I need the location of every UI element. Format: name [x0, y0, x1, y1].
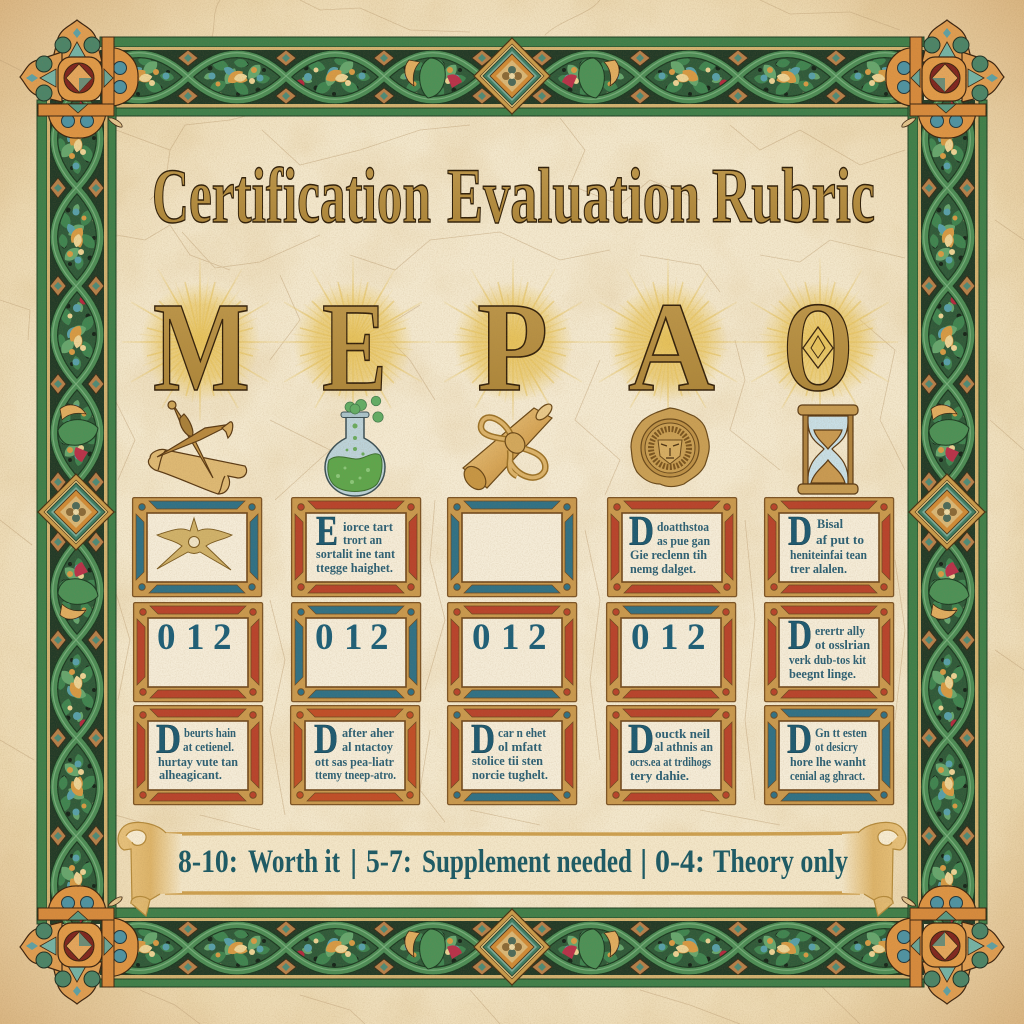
- card: P description: [448, 706, 577, 805]
- letter M with sunburst: [122, 258, 278, 420]
- rubric cards: column 3 P: [448, 498, 577, 805]
- card: A description: doatthstoa: [657, 519, 709, 534]
- letter E with sunburst: [275, 258, 431, 420]
- card: O description 2: beegnt linge.: [789, 666, 856, 681]
- letter A with sunburst: A: [628, 276, 715, 418]
- card: O description 2: [765, 603, 894, 702]
- card: O description 3: cenial ag ghract.: [790, 768, 865, 783]
- letter O with sunburst and diamond: [742, 258, 898, 420]
- card: A description 2: D: [628, 717, 654, 763]
- card: O description: Bisal: [817, 516, 843, 531]
- card: O description 2: erertr ally: [815, 623, 865, 638]
- card: M description: D: [156, 717, 181, 763]
- card: O description: heniteinfai tean: [790, 547, 868, 562]
- icon: dagger and compass on scroll: [148, 401, 247, 494]
- rubric cards: column 2 E: [291, 498, 421, 805]
- card: E description 2: ttemy tneep-atro.: [315, 767, 396, 782]
- card: E score 0 1 2: 012: [315, 617, 388, 658]
- diamond: left: [38, 474, 114, 550]
- card: M description: hurtay vute tan: [158, 754, 239, 769]
- card: O description 3: D: [787, 717, 812, 763]
- card: P score 0 1 2: [448, 603, 577, 702]
- scroll banner with score key: Theory only: [713, 844, 848, 880]
- card: O description: af put to: [816, 532, 864, 547]
- left border band: [37, 100, 116, 924]
- card: E description 2: [291, 706, 420, 805]
- scroll banner with score key: 0-4:: [655, 844, 705, 880]
- scroll banner with score key: [118, 822, 906, 916]
- letter A with sunburst: [590, 258, 746, 420]
- icon: rolled scroll with ribbon: [460, 401, 555, 494]
- card: E description: ttegge haighet.: [316, 560, 393, 575]
- card: P blank: [448, 498, 577, 597]
- scroll banner with score key: 5-7:: [366, 844, 412, 880]
- card: O description 2: verk dub-tos kit: [789, 652, 867, 667]
- card: M score 0 1 2: [134, 603, 263, 702]
- card: A description 2: ouctk neil: [655, 726, 710, 741]
- card: A description: D: [629, 509, 654, 555]
- card: O description 3: hore lhe wanht: [790, 754, 867, 769]
- letter P with sunburst: P: [477, 276, 548, 418]
- card: O description: [765, 498, 894, 597]
- letter M with sunburst: M: [153, 276, 250, 418]
- diamond: right: [909, 474, 985, 550]
- card: A description 2: ocrs.ea at trdihogs: [630, 754, 711, 769]
- card: A description 2: al athnis an: [654, 739, 714, 754]
- card: P score 0 1 2: 012: [472, 617, 546, 658]
- card: O description 2: ot osslrian: [815, 637, 871, 652]
- right border band: [908, 100, 987, 924]
- card: E description 2: al ntactoy: [342, 739, 393, 754]
- card: O description: D: [788, 509, 812, 555]
- card: A description: nemg dalget.: [630, 561, 696, 576]
- card: P description: car n ehet: [498, 725, 547, 740]
- title: Rubric: [712, 152, 875, 239]
- diamond: top: [474, 38, 550, 114]
- card: A description: [608, 498, 737, 597]
- card: E description: trort an: [343, 532, 383, 547]
- rubric cards: column 4 A: [607, 498, 737, 805]
- card: P description: stolice tii sten: [472, 753, 544, 768]
- title: Evaluation: [447, 152, 700, 239]
- card: A description: Gie reclenn tih: [630, 547, 708, 562]
- card: M compass emblem: [133, 498, 262, 597]
- card: E description 2: ott sas pea-liatr: [315, 754, 394, 769]
- card: O description 3: [765, 706, 894, 805]
- card: P description: ol mfatt: [498, 739, 543, 754]
- card: M score 0 1 2: 012: [157, 617, 232, 658]
- scroll banner with score key: |: [350, 844, 357, 880]
- scroll banner with score key: |: [640, 844, 647, 880]
- card: O description 2: D: [788, 613, 812, 659]
- card: O description 3: ot desicry: [815, 739, 858, 754]
- card: A description 2: tery dahie.: [630, 768, 689, 783]
- card: M description: alheagicant.: [159, 767, 222, 782]
- corner medallion: top right: [886, 20, 1004, 138]
- card: A description 2: [607, 706, 736, 805]
- letter O with sunburst and diamond: O: [783, 276, 853, 418]
- icon: hourglass: [798, 405, 858, 494]
- letter E with sunburst: E: [322, 276, 387, 418]
- title: [152, 152, 875, 239]
- rubric cards: column 1 M: [133, 498, 263, 805]
- card: E description 2: D: [314, 717, 338, 763]
- card: E score 0 1 2: [292, 603, 421, 702]
- card: A score 0 1 2: [607, 603, 736, 702]
- card: M description: at cetienel.: [183, 739, 234, 754]
- card: O description 3: Gn tt esten: [815, 725, 868, 740]
- icon: lion wax seal: [631, 408, 709, 487]
- corner medallion: bottom right: [886, 886, 1004, 1004]
- scroll banner with score key: Worth it: [248, 844, 340, 880]
- top border band: [100, 37, 924, 116]
- card: P description: D: [471, 717, 495, 763]
- card: M description: [134, 706, 263, 805]
- letter P with sunburst: [435, 258, 591, 420]
- icon: green potion flask: [325, 396, 385, 496]
- card: E description 2: after aher: [342, 725, 394, 740]
- scroll banner with score key: 8-10:: [178, 844, 238, 880]
- card: E description: iorce tart: [343, 519, 394, 534]
- card: O description: trer alalen.: [790, 561, 847, 576]
- title: Certification: [152, 152, 431, 239]
- card: E description: E: [316, 509, 338, 555]
- card: E description: [292, 498, 421, 597]
- corner medallion: top left: [20, 20, 138, 138]
- card: A score 0 1 2: 012: [631, 617, 706, 658]
- card: M description: beurts hain: [184, 725, 237, 740]
- corner medallion: bottom left: [20, 886, 138, 1004]
- rubric cards: column 5 O: [765, 498, 894, 805]
- diamond: bottom: [474, 909, 550, 985]
- bottom border band: [100, 908, 924, 987]
- scroll banner with score key: Supplement needed: [422, 844, 632, 880]
- card: A description: as pue gan: [657, 533, 711, 548]
- card: P description: norcie tughelt.: [472, 767, 548, 782]
- card: E description: sortalit ine tant: [316, 546, 396, 561]
